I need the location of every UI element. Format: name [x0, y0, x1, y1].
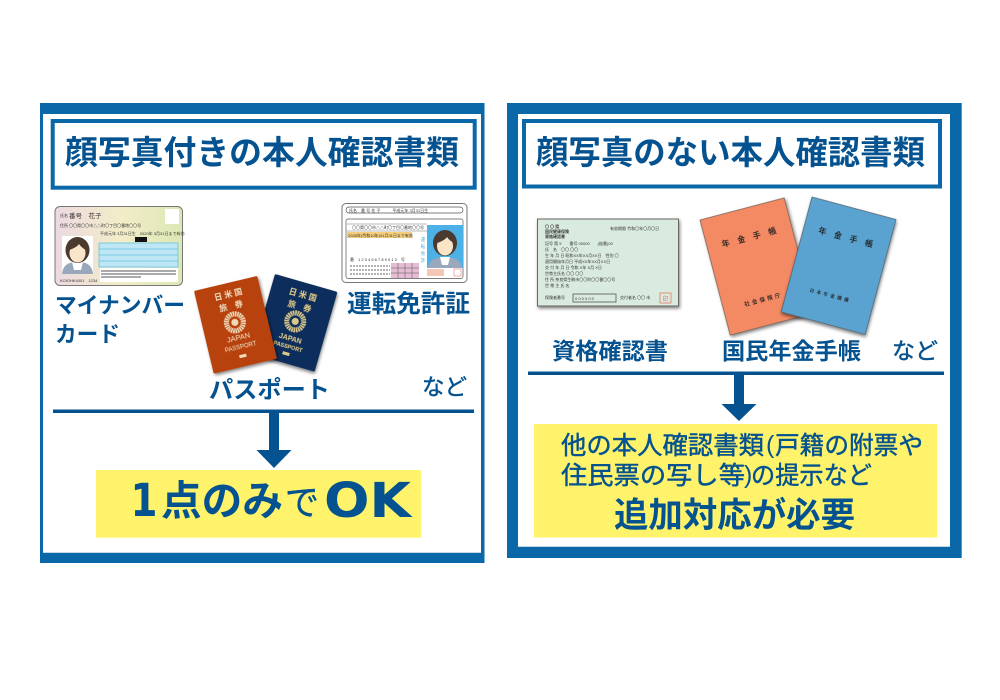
icon: orange passport: 日 米 国 — [213, 286, 243, 302]
icon: orange pension book — [700, 198, 814, 335]
callout: additional action required: 住民票の写し等 — [561, 462, 745, 490]
heading box: 顔写真のない本人確認書類 — [536, 134, 925, 171]
heading box: 顔写真付きの本人確認書類 — [65, 134, 459, 171]
card: eligibility certificate: 交 付 年 月 日 令和 X年 X月 X日 — [545, 264, 602, 270]
icon: blue pension book: 年 金 手 帳 — [817, 225, 874, 249]
icon: orange passport: PASSPORT — [225, 341, 258, 354]
icon: navy passport: 旅 券 — [287, 298, 313, 314]
card: driver's license: 〇〇県〇〇市△△町〇丁目〇番地〇〇号 — [352, 224, 424, 230]
callout: additional action required: ) — [744, 461, 752, 489]
card: eligibility certificate — [538, 219, 678, 306]
label: my number card: マイナンバー — [55, 293, 185, 318]
panel frame — [40, 103, 484, 563]
card: driver's license: 2028年(令和10年)01月31日まで有効 — [348, 232, 413, 238]
card: eligibility certificate: 有効期限 令和〇年〇月〇日 — [610, 225, 659, 231]
card: eligibility certificate: 〇 〇 県 — [545, 223, 559, 229]
card: eligibility certificate: 氏 名 〇〇 〇〇 — [545, 246, 578, 252]
label: my number card: カード — [55, 322, 120, 347]
callout: additional action required: 追加対応が必要 — [614, 496, 855, 535]
callout: additional action required: の提示など — [751, 462, 872, 490]
icon: orange pension book: 社 会 保 険 庁 — [743, 291, 782, 308]
card: my number card: KOIOHK4001 1234 — [60, 278, 98, 283]
label: pension book: 国民年金手帳 — [722, 338, 861, 364]
label: eligibility certificate: 資格確認書 — [552, 338, 668, 364]
card: eligibility certificate: 資格確認書 — [545, 233, 565, 239]
icon: blue pension book: 日 本 年 金 機 構 — [809, 287, 850, 304]
card: my number card: 住所 〇〇県〇〇市△△町〇丁目〇番地〇〇号 — [60, 222, 141, 228]
callout: additional action required: 他の本人確認書類 — [561, 432, 764, 460]
card: driver's license: 転 — [421, 244, 426, 250]
card: driver's license: 氏名 番 号 花 子 平成元年 3月31日生 — [349, 207, 428, 213]
card: driver's license: 免 — [421, 250, 426, 257]
icon: orange pension book: 年 金 手 帳 — [721, 225, 777, 249]
callout: additional action required: 戸籍の附票や — [775, 432, 923, 460]
divider line — [528, 372, 944, 375]
icon: blue pension book — [781, 197, 896, 334]
callout: one document is OK: で — [285, 482, 319, 523]
card: eligibility certificate: 国民健康保険 — [545, 228, 569, 234]
icon: navy passport: PASSPORT — [273, 340, 304, 355]
card: eligibility certificate: 印 — [662, 295, 669, 303]
label: my number card — [55, 293, 185, 347]
divider line — [53, 410, 474, 413]
card: driver's license: 運 — [421, 236, 426, 243]
panel frame — [507, 103, 962, 558]
label: passport: パスポート — [209, 377, 330, 404]
label: etc.: など — [422, 375, 467, 400]
card: driver's license: 番 1 2 3 4 5 6 7 8 9 0 1 2 号 — [350, 256, 405, 262]
callout: one document is OK: 1 — [130, 474, 158, 527]
card: my number card — [55, 206, 184, 286]
arrow: down — [722, 375, 756, 421]
icon: navy passport: JAPAN — [278, 333, 302, 346]
icon: navy passport — [252, 274, 337, 372]
label: driver's license: 運転免許証 — [347, 290, 470, 318]
panel: documents without photo — [507, 103, 962, 558]
card: my number card: 番号 花子 — [69, 211, 102, 220]
callout: additional action required: ( — [766, 431, 775, 459]
label: etc.: など — [892, 339, 938, 364]
card: eligibility certificate: 保険者番号 — [545, 294, 565, 300]
icon: navy passport: 日 米 国 — [288, 286, 318, 303]
panel: documents with photo — [40, 103, 484, 563]
icon: orange passport: 旅 券 — [218, 298, 244, 313]
card: eligibility certificate: 生 年 月 日 昭和XX年XX月XX日 性別 〇 — [545, 252, 619, 258]
card: driver's license: 許 — [421, 257, 426, 264]
callout: additional action required — [534, 424, 937, 538]
card: eligibility certificate: 適用開始年月日 平成XX年XX月XX日 — [545, 258, 610, 264]
card: eligibility certificate: 世 帯 主 氏 名 — [545, 282, 569, 288]
card: eligibility certificate: 記号 県 9 番号 00000 (枝番)00 — [545, 240, 614, 246]
card: eligibility certificate: 交付者名 〇〇 市 — [620, 294, 650, 300]
card: my number card: 氏名 — [60, 212, 68, 218]
heading box — [524, 121, 940, 186]
callout: one document is OK — [96, 470, 421, 538]
icon: orange passport: JAPAN — [226, 330, 251, 345]
card: eligibility certificate: 0 0 0 0 0 0 — [575, 296, 595, 301]
arrow: down — [256, 413, 292, 468]
card: eligibility certificate: 世帯主氏名 〇〇 〇〇 — [545, 270, 583, 276]
icon: orange passport — [194, 276, 277, 374]
callout: one document is OK: 点のみ — [161, 478, 283, 524]
icon: portrait — [428, 230, 462, 268]
card: driver's license — [342, 204, 467, 282]
callout: one document is OK: OK — [324, 473, 413, 529]
heading box — [53, 121, 475, 188]
card: my number card: 平成元年 3月31日生 2020年 3月31日まで有効 — [100, 230, 184, 236]
icon: portrait — [62, 237, 93, 274]
card: eligibility certificate: 住 所 奈良県生駒市〇〇町〇〇番〇〇号 — [545, 276, 615, 282]
